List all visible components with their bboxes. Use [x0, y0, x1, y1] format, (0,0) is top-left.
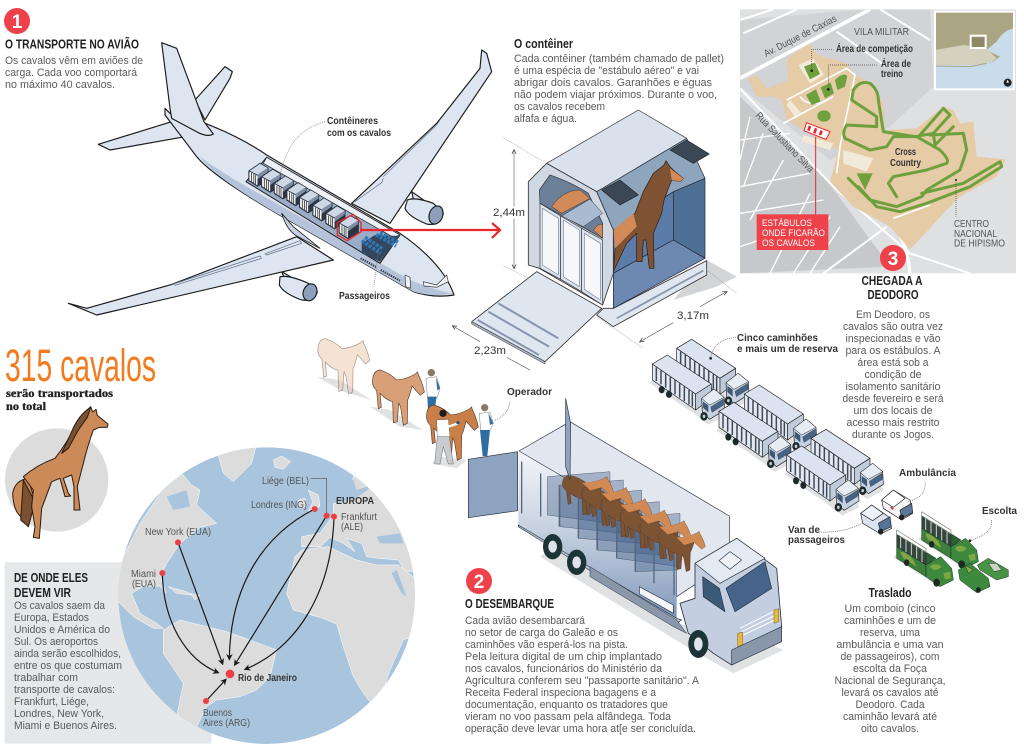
label: height: 2,44m — [493, 207, 525, 219]
number badge 3 — [880, 245, 906, 271]
right wall — [673, 178, 705, 258]
label: caminhoes: Cinco caminhões — [737, 332, 818, 344]
label: centro nacional: NACIONAL — [954, 229, 997, 240]
cut strip — [263, 157, 400, 237]
passenger van — [861, 505, 892, 534]
label: centro nacional: CENTRO — [954, 219, 989, 230]
text: de onde: Londres, New York, — [14, 708, 104, 720]
back wall — [613, 192, 673, 273]
container roof — [547, 110, 687, 192]
horse necks orange — [582, 477, 705, 549]
heading: chegada — [862, 274, 922, 302]
third horse — [426, 405, 478, 460]
text: de onde: Frankfurt, Liége, — [14, 696, 89, 708]
passenger pointer — [374, 248, 378, 287]
gray panel and globe — [5, 443, 430, 747]
text: de onde: trabalhar com — [14, 672, 78, 684]
containers row — [248, 163, 359, 239]
bumper — [732, 627, 782, 665]
horse rumps at opening — [552, 190, 603, 238]
text: de onde: entre os que costumam — [14, 660, 122, 672]
gray circle — [5, 428, 108, 532]
container illustration — [453, 110, 737, 370]
truck shadow — [540, 547, 783, 673]
label: passageiros: Passageiros — [339, 290, 390, 302]
opening glass — [562, 199, 603, 227]
near wing — [68, 237, 333, 315]
land masses — [118, 448, 415, 726]
cross country track — [844, 82, 1002, 212]
city blocks — [740, 9, 933, 160]
vet — [435, 410, 460, 464]
text: transporte: Os cavalos vêm em aviões de — [5, 55, 143, 67]
container floor — [613, 240, 705, 308]
horses and operators — [317, 339, 510, 468]
streets — [740, 9, 970, 273]
globe labels: (ALE) — [341, 522, 363, 533]
text: traslado: levará os cavalos até — [842, 687, 938, 699]
grounds roads — [783, 68, 930, 218]
chassis — [518, 525, 682, 623]
text: de onde: ainda serão escolhidos, — [14, 648, 121, 660]
stables label: ONDE FICARÃO — [762, 228, 825, 239]
text: conteiner: alfafa e água. — [514, 113, 577, 125]
heading: de onde: DEVEM VIR — [14, 586, 71, 600]
big truck illustration — [468, 398, 783, 673]
container pointer — [277, 122, 325, 187]
number badge 3: 3 — [888, 249, 898, 270]
ambulance — [882, 490, 913, 520]
text: desembarque: Pela leitura digital de um chip implantado — [465, 651, 662, 663]
text: chegada: desde fevereiro e será — [842, 393, 944, 405]
open rear flap — [566, 398, 571, 480]
globe labels: (EUA) — [132, 579, 156, 590]
seas — [167, 477, 407, 597]
map labels bold: treino — [881, 68, 903, 80]
wing details — [173, 120, 440, 285]
windows — [361, 258, 400, 281]
number badge 1 — [4, 8, 30, 34]
text: conteiner: Cada contêiner (também chamado de pallet) — [514, 53, 724, 65]
front frame — [528, 163, 613, 305]
six trucks — [650, 339, 883, 516]
globe labels: Londres (ING) — [251, 500, 307, 511]
faded horse — [318, 339, 370, 394]
text: conteiner: os cavalos recebem — [514, 101, 605, 113]
large horse — [13, 407, 108, 538]
competition field — [798, 58, 824, 83]
text: traslado — [834, 603, 946, 735]
subtitle — [6, 388, 114, 413]
stables label: OS CAVALOS — [762, 238, 815, 249]
cab — [680, 538, 782, 665]
label: width: 2,23m — [474, 345, 506, 357]
map labels: VILA MILITAR — [854, 27, 909, 38]
container shadow — [673, 260, 737, 300]
globe labels: Aires (ARG) — [203, 718, 250, 729]
text: transporte: carga. Cada voo comportará — [5, 67, 138, 79]
front opening — [539, 175, 603, 238]
route arrows — [162, 509, 334, 701]
globe labels: Frankfurt — [341, 512, 377, 523]
green fields — [806, 75, 873, 190]
grille near — [602, 180, 638, 205]
text: desembarque: Receita Federal inspeciona bagagens e a — [465, 687, 657, 699]
operator pointer — [494, 402, 510, 421]
second horse — [372, 370, 424, 425]
tail fin — [162, 43, 213, 135]
text: traslado: caminhão levará até — [843, 711, 937, 723]
text: traslado: caminhões e um de — [844, 615, 936, 627]
text: chegada: durante os Jogos. — [852, 429, 934, 441]
buildings — [787, 100, 873, 172]
text: desembarque: nos cavalos, funcionários do Ministério da — [465, 663, 663, 675]
convoy pointers — [711, 338, 992, 541]
stables marker — [804, 123, 830, 215]
heading: transporte: O TRANSPORTE NO AVIÃO — [5, 36, 139, 52]
far wing — [352, 50, 492, 223]
truck open door — [468, 452, 518, 518]
label: centro nacional: DE HIPISMO — [954, 238, 1005, 250]
globe — [113, 443, 430, 747]
number badge 1: 1 — [12, 12, 23, 33]
airplane illustration — [68, 43, 492, 315]
text: traslado: Deodoro. Cada — [856, 699, 925, 711]
text: conteiner — [514, 53, 724, 125]
escort trucks — [893, 512, 978, 587]
text: chegada: um dos locais de — [854, 405, 932, 417]
city dots — [159, 506, 337, 704]
cutaway interior — [246, 157, 400, 263]
text: chegada: cavalos são outra vez — [843, 321, 943, 333]
label: conteineres: com os cavalos — [327, 127, 391, 139]
heading: de onde — [14, 571, 88, 600]
fuselage — [165, 108, 454, 296]
text: desembarque: no setor de carga do Galeão e os — [465, 627, 618, 639]
stables label: ESTÁBULOS — [762, 218, 812, 229]
label: centro nacional — [954, 219, 1005, 250]
truck cargo side — [518, 452, 677, 618]
text: de onde: transporte de cavalos: — [14, 684, 115, 696]
text: conteiner: é uma espécia de "estábulo aéreo" e vai — [514, 65, 699, 77]
text: de onde: Os cavalos saem da — [14, 600, 106, 612]
map labels — [753, 14, 909, 175]
truck roof and far wall — [519, 422, 729, 597]
globe labels bold: EUROPA — [336, 495, 374, 507]
operator behind — [426, 369, 440, 418]
headline: 315 cavalos: 315 cavalos — [5, 340, 156, 391]
text: de onde: Miami e Buenos Aires. — [14, 720, 117, 732]
text: traslado: oito cavalos. — [861, 723, 919, 735]
text: conteiner: abrigar dois cavalos. Garanhões e éguas — [514, 77, 712, 89]
grille far — [670, 140, 709, 163]
label: operador: Operador — [507, 386, 552, 398]
text: de onde: Europa, Estados — [14, 612, 89, 624]
text: chegada: área está sob a — [858, 357, 929, 369]
map of Deodoro — [740, 9, 1016, 273]
horse on gray circle — [5, 407, 108, 538]
text: traslado: ambulância e uma van — [836, 639, 944, 651]
text: chegada: inspecionadas e vão — [846, 333, 940, 345]
map background — [740, 9, 1016, 273]
label: caminhoes: e mais um de reserva — [737, 343, 838, 355]
number badge 2 — [466, 568, 492, 594]
subtitle: serão transportados — [6, 388, 114, 400]
near engine — [279, 272, 319, 303]
text: traslado: de passageiros), com — [840, 651, 940, 663]
dimension lines — [453, 137, 737, 370]
text: desembarque: vieram no voo passam pela alfândega. Toda — [465, 711, 672, 723]
globe labels: Liége (BEL) — [262, 476, 309, 487]
windshield — [726, 562, 772, 612]
text: transporte — [5, 55, 143, 91]
label: escolta: Escolta — [982, 505, 1017, 517]
heading: chegada: DEODORO — [868, 288, 919, 302]
text: desembarque: caminhões vão esperá-los na pista. — [465, 639, 628, 651]
label: van: Van de — [788, 524, 820, 536]
side window — [703, 577, 725, 612]
text: desembarque: Cada avião desembarcará — [465, 615, 586, 627]
text: chegada: acesso mais restrito — [846, 417, 940, 429]
text: chegada: condição de — [864, 369, 922, 381]
front doors — [540, 203, 603, 305]
text: de onde — [14, 600, 122, 732]
seats — [362, 233, 400, 262]
cockpit and door — [405, 275, 448, 288]
cargo posts — [522, 462, 674, 595]
hipismo grounds — [748, 43, 1006, 249]
globe labels: Miami — [131, 569, 156, 580]
map labels bold — [836, 42, 921, 169]
text: desembarque — [465, 615, 700, 735]
red stables label box — [757, 214, 828, 250]
horse in container — [613, 161, 683, 272]
ramp stripes — [478, 303, 558, 355]
highlighted container — [337, 214, 361, 241]
horses in truck — [563, 475, 705, 571]
text: desembarque: Agricultura conferem seu "passaporte sanitário". A — [465, 675, 700, 687]
label: ambulancia: Ambulância — [899, 467, 956, 479]
fuselage shading — [200, 157, 453, 295]
panel: de onde — [5, 562, 211, 744]
globe labels: New York (EUA) — [145, 527, 211, 538]
ground shadows — [317, 377, 467, 468]
text: de onde: Unidos e América do — [14, 624, 110, 636]
far engine — [405, 192, 445, 226]
text: de onde: Sul. Os aeroportos — [14, 636, 98, 648]
map labels bold: Cross — [895, 146, 916, 158]
globe labels bold — [238, 495, 374, 684]
globe labels: Buenos — [203, 708, 232, 719]
label: van — [788, 524, 845, 546]
label: length: 3,17m — [677, 310, 709, 322]
heading: conteiner: O contêiner — [514, 37, 573, 51]
label: caminhoes — [737, 332, 838, 355]
number badge 2: 2 — [474, 572, 484, 593]
map pointers — [812, 49, 956, 217]
far tailplane — [195, 67, 232, 120]
chassis lower — [590, 567, 687, 633]
stall panels — [547, 472, 680, 572]
ramp — [472, 272, 602, 362]
text: chegada: Em Deodoro, os — [856, 309, 930, 321]
red arrow to container — [360, 223, 500, 238]
map labels: Av. Duque de Caxias — [762, 14, 839, 60]
inset map — [935, 12, 1014, 89]
map labels bold: Área de — [881, 57, 911, 70]
operator — [479, 404, 493, 456]
text: chegada: isolamento sanitário — [846, 381, 940, 393]
upper interior — [597, 138, 705, 230]
heading: chegada: CHEGADA A — [862, 274, 922, 288]
label: van: passageiros — [788, 534, 845, 546]
rear wheels — [543, 534, 586, 575]
text: traslado: reserva, uma — [860, 627, 921, 639]
text: traslado: escolta da Foça — [853, 663, 928, 675]
text: desembarque: operação deve levar uma hora at[e ser concluída. — [465, 723, 696, 735]
globe labels — [131, 476, 377, 729]
liege leader — [311, 478, 327, 513]
text: transporte: no máximo 40 cavalos. — [5, 79, 115, 91]
escort jeep — [958, 563, 990, 593]
text: traslado: Nacional de Segurança, — [834, 675, 946, 687]
text: conteiner: não podem viajar próximos. Durante o voo, — [514, 89, 717, 101]
text: traslado: Um comboio (cinco — [844, 603, 936, 615]
map labels: Rua Salustiano Silva — [753, 110, 816, 175]
label: conteineres: Contêineres — [327, 115, 378, 127]
convoy illustration — [650, 338, 1008, 593]
map labels bold: Country — [890, 157, 921, 169]
front wheel — [688, 630, 708, 658]
label: conteineres — [327, 115, 391, 139]
heading: desembarque: O DESEMBARQUE — [465, 597, 554, 611]
map labels bold: Área de competição — [836, 42, 913, 55]
escort car — [977, 558, 1008, 580]
pallet base — [597, 261, 707, 327]
globe labels bold: Rio de Janeiro — [238, 672, 297, 684]
grille and lamps — [740, 612, 775, 635]
text: chegada — [842, 309, 944, 441]
text: chegada: para os estábulos. A — [846, 345, 941, 357]
wing fairing — [282, 213, 320, 248]
stables label — [762, 218, 825, 249]
near tailplane — [98, 122, 185, 150]
text: desembarque: documentação, enquanto os tratadores que — [465, 699, 668, 711]
heading: de onde: DE ONDE ELES — [14, 571, 88, 585]
subtitle: no total — [6, 401, 46, 413]
heading: traslado: Traslado — [868, 586, 912, 600]
